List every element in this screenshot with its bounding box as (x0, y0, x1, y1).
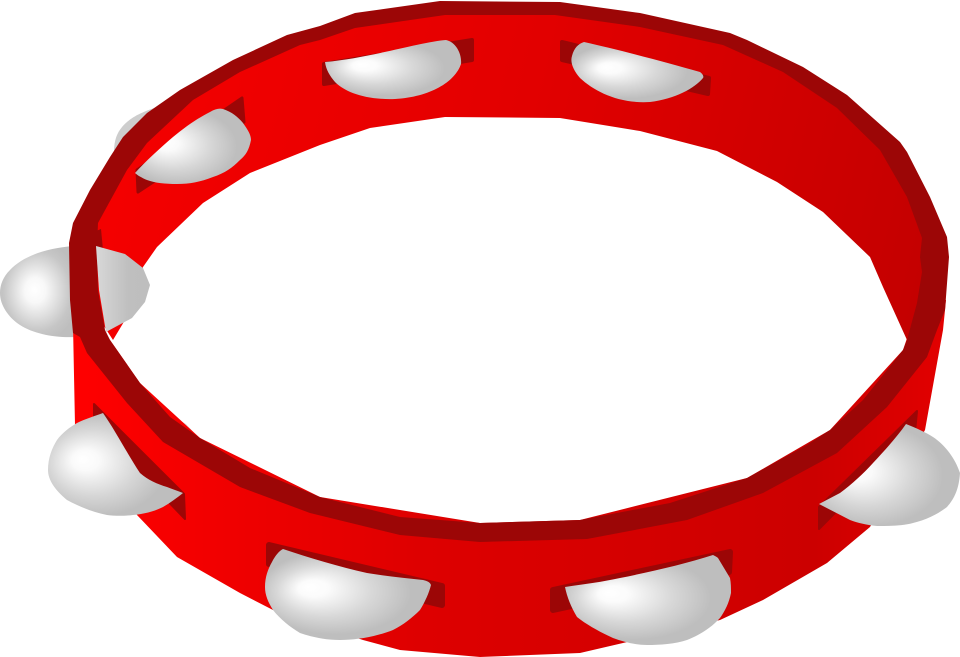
tambourine inner band (far side) (85, 6, 940, 340)
jingle: behind rim lower right (812, 430, 836, 445)
slot: left inner (96, 229, 103, 250)
jingle: lower right (819, 424, 960, 526)
slot: bottom right (553, 552, 730, 610)
jingle: top right (571, 42, 703, 102)
jingle: behind rim lower left (172, 416, 199, 445)
jingle: upper left (135, 109, 251, 184)
jingle: left inner half (96, 246, 150, 332)
jingle: left outer (0, 246, 76, 337)
jingle: behind rim upper left (114, 106, 160, 152)
slot: lower left (94, 404, 185, 519)
tambourine rim (69, 1, 949, 542)
slot: top right (562, 42, 709, 94)
tambourine front band (73, 300, 946, 657)
jingle: top left (325, 40, 461, 99)
slot: upper left (137, 98, 244, 192)
jingle: bottom right (565, 555, 731, 645)
slot: top left (324, 40, 472, 84)
slot: bottom left (269, 545, 442, 605)
jingle: bottom left (265, 549, 431, 640)
slot: lower right (819, 411, 917, 529)
jingle: lower left (48, 413, 183, 516)
